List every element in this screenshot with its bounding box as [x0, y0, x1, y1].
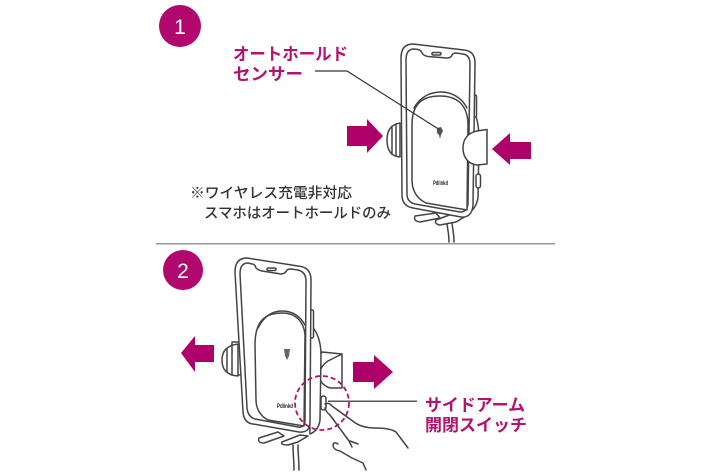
- illustration: phone holder step 1: [387, 44, 487, 242]
- outer frame: [235, 258, 311, 432]
- feet: [259, 432, 284, 443]
- brand mark: Pdlinkd: [433, 180, 448, 187]
- step 1 badge: 1: [174, 16, 186, 39]
- dashed highlight circle: [295, 376, 349, 430]
- left knob: [232, 342, 258, 375]
- back body: [470, 108, 479, 212]
- hand pressing switch: [325, 403, 408, 470]
- label: auto hold sensor: オートホールド: [233, 45, 348, 64]
- wireless icon: [437, 127, 443, 139]
- section divider: [156, 243, 555, 244]
- wireless icon: [284, 349, 290, 360]
- right arm: [463, 130, 487, 165]
- cable: [447, 220, 454, 242]
- arrow: move left: [181, 336, 214, 372]
- label: auto hold sensor: センサー: [233, 65, 303, 84]
- label: side arm switch: サイドアーム: [425, 396, 525, 415]
- arrow: move right: [353, 355, 393, 389]
- back body: [308, 322, 321, 434]
- note text: スマホはオートホールドのみ: [204, 205, 391, 222]
- arrow: press left: [492, 133, 531, 165]
- step 2 badge: [163, 250, 203, 290]
- label: auto hold sensor: [233, 45, 348, 84]
- step 1 badge: [159, 5, 201, 47]
- leader line: sensor: [315, 71, 440, 130]
- brand mark: Pdlinkd: [277, 403, 293, 410]
- note text: [190, 185, 391, 222]
- charging pad: [412, 96, 468, 210]
- label: side arm switch: [425, 396, 527, 435]
- inner frame: [406, 49, 470, 212]
- note text: ※ワイヤレス充電非対応: [190, 185, 352, 202]
- right arm: [318, 352, 342, 388]
- leader line: side switch: [328, 400, 417, 402]
- notch speaker: [432, 52, 441, 55]
- charging pad: [255, 313, 305, 426]
- side button: [310, 310, 314, 338]
- label: side arm switch: 開閉スイッチ: [425, 416, 527, 435]
- arrow: press right: [347, 119, 383, 153]
- step 2 badge: 2: [177, 260, 189, 283]
- left knob: [387, 123, 400, 157]
- outer frame: [401, 44, 475, 217]
- feet: [415, 213, 440, 222]
- side switch: [321, 396, 326, 410]
- cable: [293, 445, 299, 470]
- notch speaker: [267, 268, 276, 270]
- inner frame: [240, 263, 306, 427]
- illustration: phone holder step 2: [222, 258, 342, 470]
- side button: [473, 95, 476, 117]
